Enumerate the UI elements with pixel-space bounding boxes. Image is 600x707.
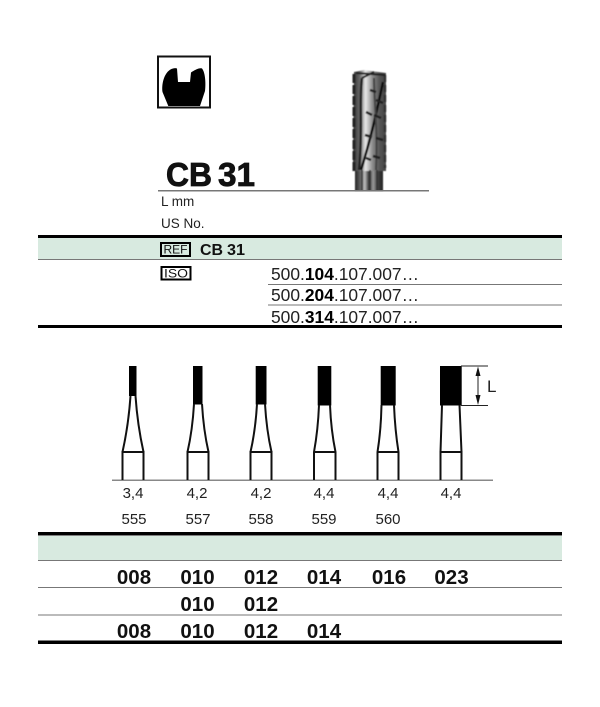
bur profile 559 [314, 366, 336, 480]
row 3 sizes [117, 620, 342, 643]
row 3 sizes: 014 [307, 620, 342, 643]
table: reference and ISO codes [38, 235, 562, 328]
labels: US numbers [121, 511, 401, 528]
row 1 sizes: 012 [244, 566, 278, 589]
label: L mm: L mm [161, 194, 194, 209]
row 2 sizes [180, 593, 278, 616]
badge: ISO: ISO [164, 266, 188, 280]
table: size codes [38, 532, 562, 644]
labels: US numbers: 555 [121, 511, 147, 528]
labels: US numbers: 557 [185, 511, 211, 528]
bur profile 555 [122, 366, 144, 480]
row 2 sizes: 012 [244, 593, 278, 616]
row 1 sizes: 023 [434, 566, 469, 589]
labels: L mm values [123, 485, 461, 502]
row 3 sizes: 010 [180, 620, 215, 643]
row 2 sizes: 010 [180, 593, 215, 616]
icon: cavity shape [158, 56, 210, 108]
labels: L mm values: 4,2 [251, 485, 271, 502]
row 1 sizes: 008 [117, 566, 151, 589]
labels: L mm values: 4,2 [187, 485, 207, 502]
title: CB 31: CB [166, 156, 212, 193]
labels: L mm values: 4,4 [314, 485, 334, 502]
badge: REF: REF [164, 242, 188, 256]
ISO code 204: 500.204.107.007… [271, 285, 419, 305]
rule under title [158, 190, 429, 192]
title: CB 31: 31 [218, 156, 255, 193]
reference name: CB [200, 242, 223, 259]
bur profile 023 [440, 366, 462, 480]
labels: L mm values: 4,4 [378, 485, 398, 502]
dimension: L [461, 366, 496, 406]
labels: US numbers: 559 [311, 511, 337, 528]
row 1 sizes: 014 [307, 566, 342, 589]
label: US No.: US No. [161, 216, 205, 231]
row 1 sizes: 016 [372, 566, 406, 589]
row 1 sizes: 010 [180, 566, 215, 589]
row 3 sizes: 012 [244, 620, 278, 643]
diagram: bur size profiles [112, 366, 496, 481]
labels: L mm values: 4,4 [441, 485, 461, 502]
bur profile 558 [250, 366, 272, 480]
row 1 sizes [117, 566, 469, 589]
labels: US numbers: 558 [248, 511, 274, 528]
ISO code 104: 500.104.107.007… [271, 264, 419, 284]
bur profile 557 [188, 366, 208, 480]
reference name: 31 [227, 242, 245, 259]
row 3 sizes: 008 [117, 620, 151, 643]
bur profile 560 [378, 366, 398, 480]
ISO code 314: 500.314.107.007… [271, 307, 419, 327]
labels: US numbers: 560 [375, 511, 401, 528]
dimension: L: L [487, 377, 496, 396]
product photo: bur [353, 70, 386, 191]
labels: L mm values: 3,4 [123, 485, 143, 502]
